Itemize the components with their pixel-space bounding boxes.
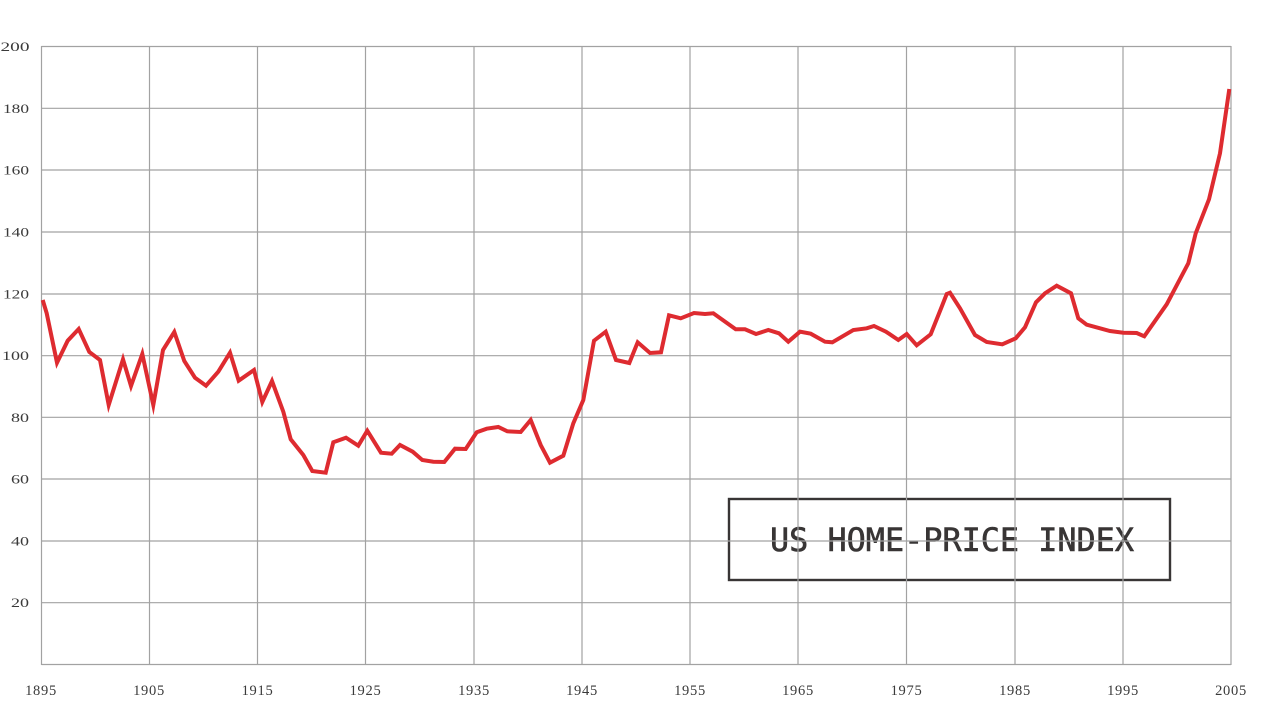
x axis labels (25, 683, 1247, 699)
x axis labels: 1965 (782, 683, 814, 699)
y axis labels: 80 (11, 411, 29, 425)
y axis labels: 200 (0, 40, 29, 54)
y axis labels: 140 (3, 226, 29, 240)
red price index line (43, 89, 1229, 473)
x axis labels: 1975 (891, 683, 922, 699)
x axis labels: 1915 (242, 683, 273, 699)
y axis labels: 20 (11, 596, 29, 610)
x axis labels: 1935 (458, 683, 490, 699)
y axis labels: 160 (3, 164, 29, 178)
x axis labels: 1985 (999, 683, 1031, 699)
grid lines (42, 46, 1231, 665)
x axis labels: 1945 (566, 683, 598, 699)
x axis labels: 1895 (25, 683, 57, 699)
x axis labels: 1995 (1107, 683, 1139, 699)
y axis labels: 180 (3, 102, 29, 116)
y axis labels: 60 (11, 472, 29, 486)
title text: US HOME-PRICE INDEX (770, 523, 1134, 559)
x axis labels: 1925 (350, 683, 381, 699)
x axis labels: 1955 (674, 683, 706, 699)
y axis labels: 40 (11, 534, 29, 548)
y axis labels: 120 (3, 288, 29, 302)
x axis labels: 1905 (133, 683, 165, 699)
y axis labels (0, 40, 29, 610)
title box (729, 499, 1170, 580)
y axis labels: 100 (2, 349, 29, 363)
x axis labels: 2005 (1215, 683, 1247, 699)
